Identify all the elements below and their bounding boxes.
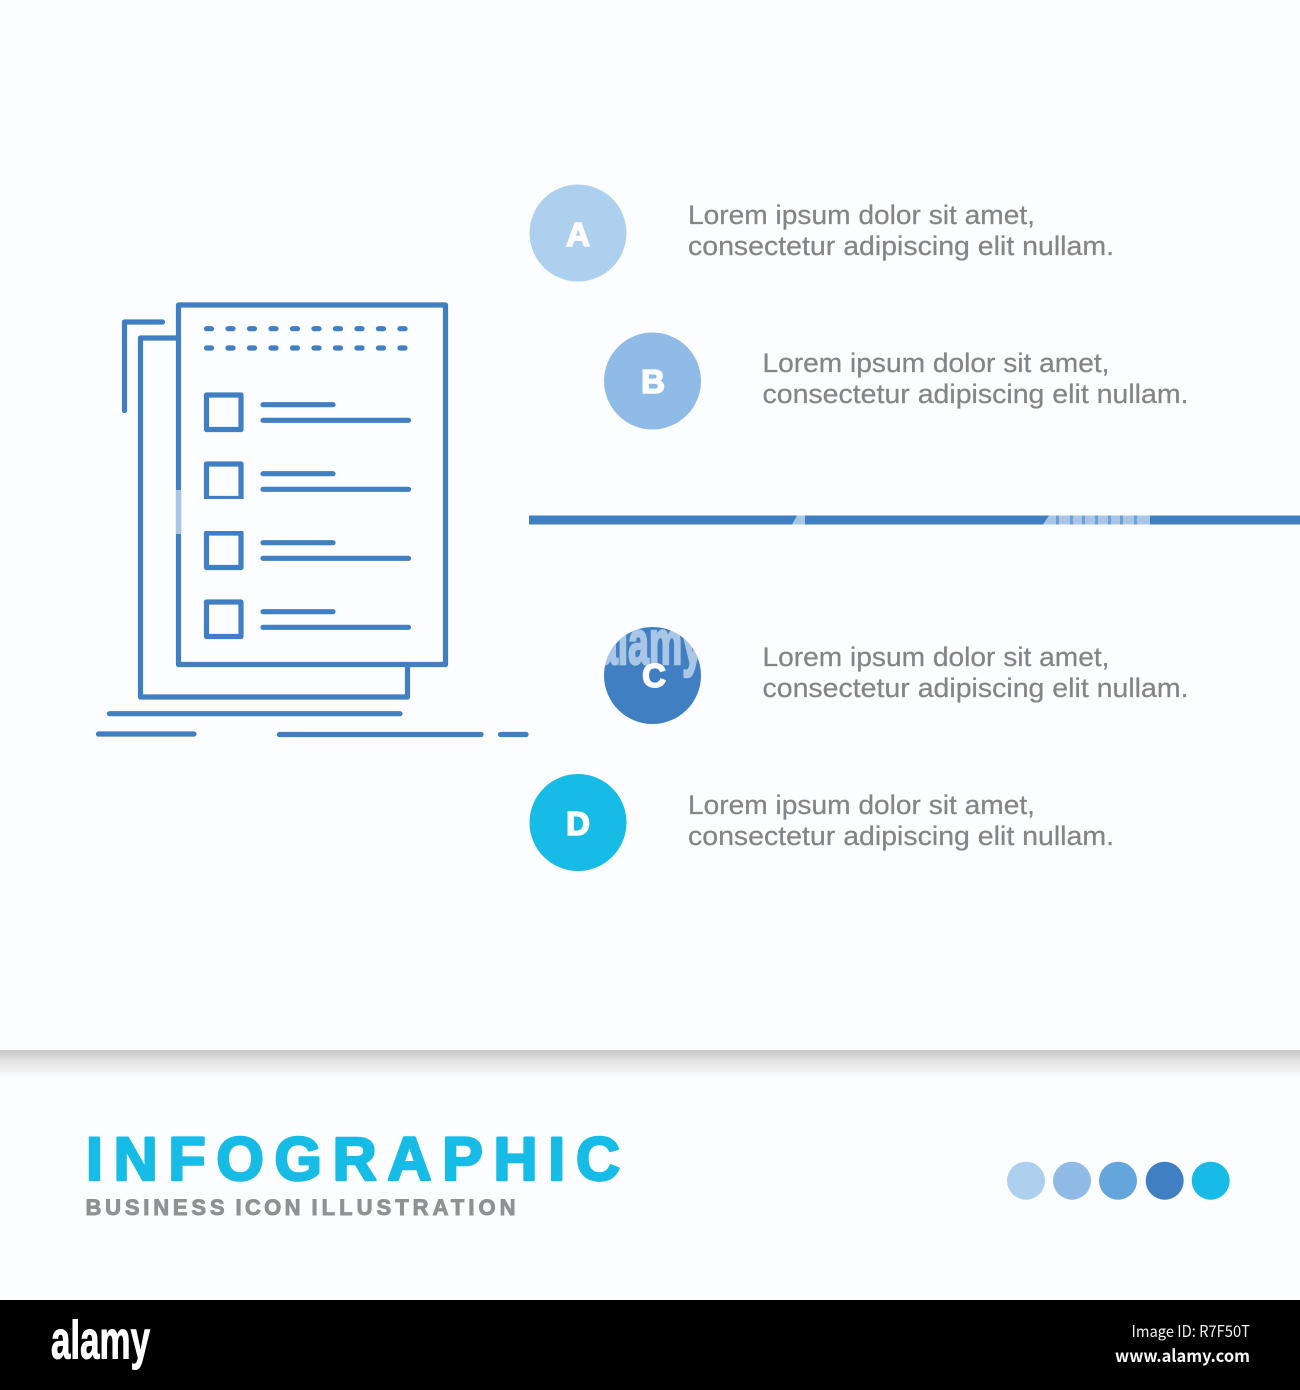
step A [530, 184, 1114, 282]
checklist row 4 [206, 602, 408, 636]
colour dots [1007, 1162, 1230, 1200]
subtitle: BUSINESS [86, 1195, 224, 1220]
text A: Lorem ipsum dolor sit amet, [688, 200, 1035, 230]
step C [604, 627, 1186, 724]
text C: Lorem ipsum dolor sit amet, [762, 642, 1110, 672]
step D [530, 774, 1114, 871]
letter B: B [641, 363, 665, 400]
text B [762, 348, 1188, 409]
black footer bar [0, 1300, 1300, 1390]
circle C [604, 627, 701, 724]
text D: consectetur adipiscing elit nullam. [688, 821, 1114, 851]
circle A [530, 184, 626, 282]
image id: Image ID: R7F50T [1132, 1318, 1250, 1342]
website: www.alamy.com [1115, 1342, 1250, 1367]
footer shadow band [0, 1050, 1300, 1079]
letter A: A [566, 216, 590, 253]
subtitle [86, 1195, 516, 1220]
checklist row 3 [206, 533, 408, 568]
text D: Lorem ipsum dolor sit amet, [688, 790, 1035, 820]
subtitle: ILLUSTRATION [312, 1195, 516, 1220]
alamy logo: alamy [51, 1310, 150, 1370]
step B [604, 332, 1188, 430]
letter C: C [642, 657, 666, 694]
checklist row 2 [206, 464, 408, 498]
letter D: D [566, 805, 590, 842]
far back sheet edge [124, 322, 162, 410]
watermark on icon [176, 490, 244, 534]
text D [688, 790, 1114, 851]
ground lines [98, 714, 526, 734]
text C: consectetur adipiscing elit nullam. [762, 673, 1188, 703]
circle B [604, 332, 701, 430]
back sheet [140, 338, 408, 697]
text A: consectetur adipiscing elit nullam. [688, 231, 1114, 261]
circle D [530, 774, 626, 871]
title: INFOGRAPHIC [86, 1125, 620, 1193]
subtitle: ICON [236, 1195, 300, 1220]
front sheet [178, 305, 446, 664]
text B: consectetur adipiscing elit nullam. [762, 379, 1188, 409]
icon: checklist document [98, 305, 526, 734]
checklist row 1 [206, 395, 408, 430]
text B: Lorem ipsum dolor sit amet, [762, 348, 1110, 378]
divider line [529, 516, 1300, 524]
text A [688, 200, 1114, 261]
watermark on circle C: alamy [597, 609, 703, 678]
text C [762, 642, 1188, 703]
dotted header lines [206, 329, 408, 348]
